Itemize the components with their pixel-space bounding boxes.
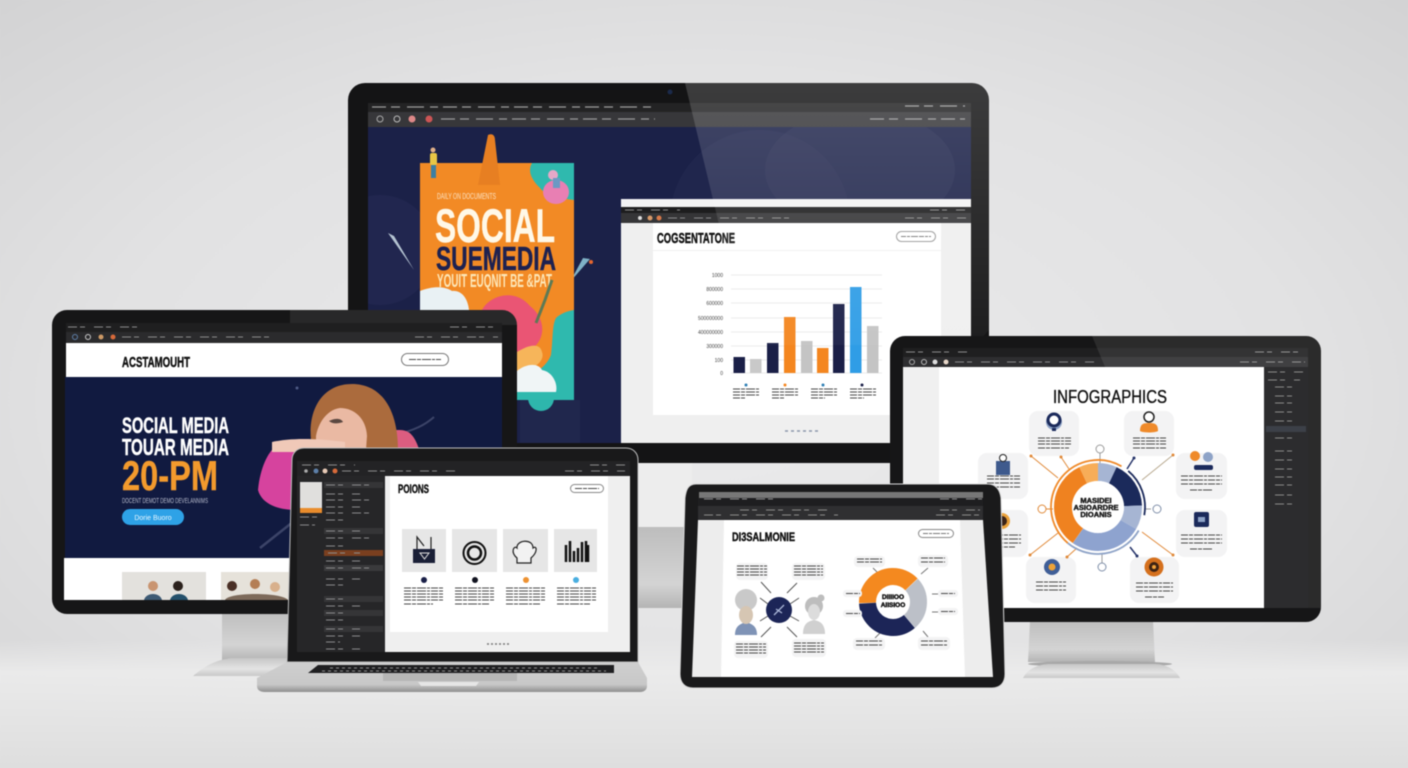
browser toolbar [368,112,971,127]
eye [329,419,343,423]
icon: orange person [1140,412,1158,432]
arm [272,439,345,452]
monitor stand [1023,620,1180,678]
headline: social: SOCIAL [435,199,555,252]
monitor stand [638,460,692,608]
site logo text: ACSTAMOUHT [122,354,190,371]
content card [653,223,941,415]
device: right monitor with infographic [890,336,1321,678]
chart axis labels: 0 [720,371,723,377]
donut label [1073,496,1119,519]
left strip [903,367,939,608]
donut hole [1072,481,1124,533]
tablet body [680,484,1005,688]
laptop base [257,662,647,692]
icon: blue ring [1046,414,1062,431]
poster: social media [420,134,574,411]
orange hanging shape [478,134,500,185]
icon card: bars [554,529,597,572]
header divider [653,250,941,251]
device: tablet [680,484,1005,688]
chart axis labels: 300000 [706,344,723,350]
hero panel [65,377,502,558]
window top bar [621,207,971,213]
window frame [621,199,971,443]
cloud [420,287,469,310]
chart axis labels: 800000 [706,287,723,293]
card button [896,232,936,242]
icon: brown sun [1144,558,1164,576]
headline: suemedia: SUEMEDIA [436,240,556,277]
face [316,408,367,450]
browser bars [903,348,1308,367]
icon: blue sun [1044,559,1060,575]
figure: yellow climber [430,148,437,178]
figure: seated pink [543,170,569,204]
icon: people cluster [1190,451,1213,470]
tablet donut [857,566,938,638]
infographic heading: INFOGRAPHICS [1053,387,1167,407]
lower strip [64,558,502,600]
wallpaper: navy screen [368,126,972,444]
chart axis labels: 100 [715,358,723,364]
pager [487,643,510,645]
pager [785,430,818,432]
hero headline time: 20-PM [122,452,218,499]
decorative needle right [570,258,593,282]
right sidebar [1264,367,1308,608]
page heading: POIONS [398,482,429,496]
device: left monitor with landing page [52,310,517,676]
ring segments [1049,458,1147,556]
webcam [668,90,672,94]
small heading: DAILY ON DOCUMENTS [437,192,496,201]
device: laptop [257,448,647,692]
donut connectors [863,568,938,638]
sidebar rows [300,482,383,649]
poster tab [528,385,554,411]
slide thumbnail [300,482,322,513]
monitor bezel [52,310,517,614]
monitor bezel [348,83,989,463]
donut label: AIISIOO [881,602,905,609]
donut label: MASIDEI [1080,496,1112,505]
donut chart [1032,441,1164,573]
glass reflection [1092,336,1321,608]
lower cloud [517,365,556,392]
monitor bezel [890,336,1321,622]
chart axis labels [698,273,723,377]
page button [570,484,604,492]
browser top bar [368,103,971,112]
icon card: ring [452,529,497,572]
step text [404,588,596,604]
chart bars [734,287,878,373]
hero headline line two: TOUAR MEDIA [122,434,229,460]
teal lower area [517,310,574,400]
hero button: Dorie Buoro [134,515,172,522]
browser bars [66,323,502,343]
donut label [881,594,905,609]
chart axis labels: 1000 [712,273,723,279]
step dots [421,577,579,583]
lower orange art [517,346,543,372]
chart legend [733,384,876,398]
window title bar [621,199,971,207]
icon: navy gear [1194,512,1209,527]
tablet button [918,530,954,538]
icon: navy bag [996,454,1010,475]
site header [66,343,502,377]
browser bars [297,461,630,476]
poster body [420,163,574,400]
tablet canvas [692,520,993,677]
pink blob [482,295,542,354]
pink shoulder [396,429,419,448]
icon: orange medallion [994,513,1010,529]
decorative needle left [388,233,414,270]
pink sleeve [257,450,294,510]
white canvas [939,367,1264,608]
donut label: DIIIIOO [882,594,904,601]
connectors [760,582,799,637]
donut label: DIOANIS [1080,510,1112,519]
outer arc [1032,441,1164,573]
header button [402,354,448,366]
teal corner [530,163,574,200]
hub diagram [734,563,826,658]
donut segments [857,566,929,638]
hero subline: DOCENT DEMOT DEMO DEVELANNIMS [122,498,208,505]
hero button [122,509,184,525]
glass reflection [685,83,989,345]
chart axis labels: 500000000 [698,316,723,322]
infographic icons [994,412,1213,576]
bar chart [698,273,882,398]
window toolbar [621,213,971,223]
device: large central monitor [325,83,989,608]
card heading: COGSENTATONE [657,230,735,247]
hair [311,384,398,450]
donut callouts [843,555,958,650]
laptop lid [287,448,638,662]
editor sidebar [297,476,385,652]
hub callouts [734,563,826,658]
photo: group [221,572,291,600]
icon card: glove [503,529,548,572]
presentation window [621,199,971,443]
tablet heading: DI3SALMONIE [732,530,795,544]
headline: tagline: YOUIT EUQNIT BE &PAT [437,271,552,291]
laptop canvas [385,476,630,652]
chart gridlines [731,275,882,373]
bezel reflection [290,310,517,325]
card text [987,438,1222,597]
hero headline line one: SOCIAL MEDIA [122,413,229,438]
browser bars [698,492,983,520]
donut label: ASIOARDRE [1073,503,1119,512]
person left [735,589,757,635]
icon card: bag [402,529,446,572]
page card [390,476,608,632]
hero portrait [258,384,420,510]
person right [803,594,825,634]
photo: two people [122,572,206,600]
donut spokes [1028,445,1174,571]
infographic cards [978,411,1227,603]
monitor stand [193,610,292,676]
tablet page [721,520,965,677]
chart axis labels: 400000000 [698,330,723,336]
chart axis labels: 600000 [706,301,723,307]
pole tool [536,280,552,323]
hub circle [766,597,792,623]
